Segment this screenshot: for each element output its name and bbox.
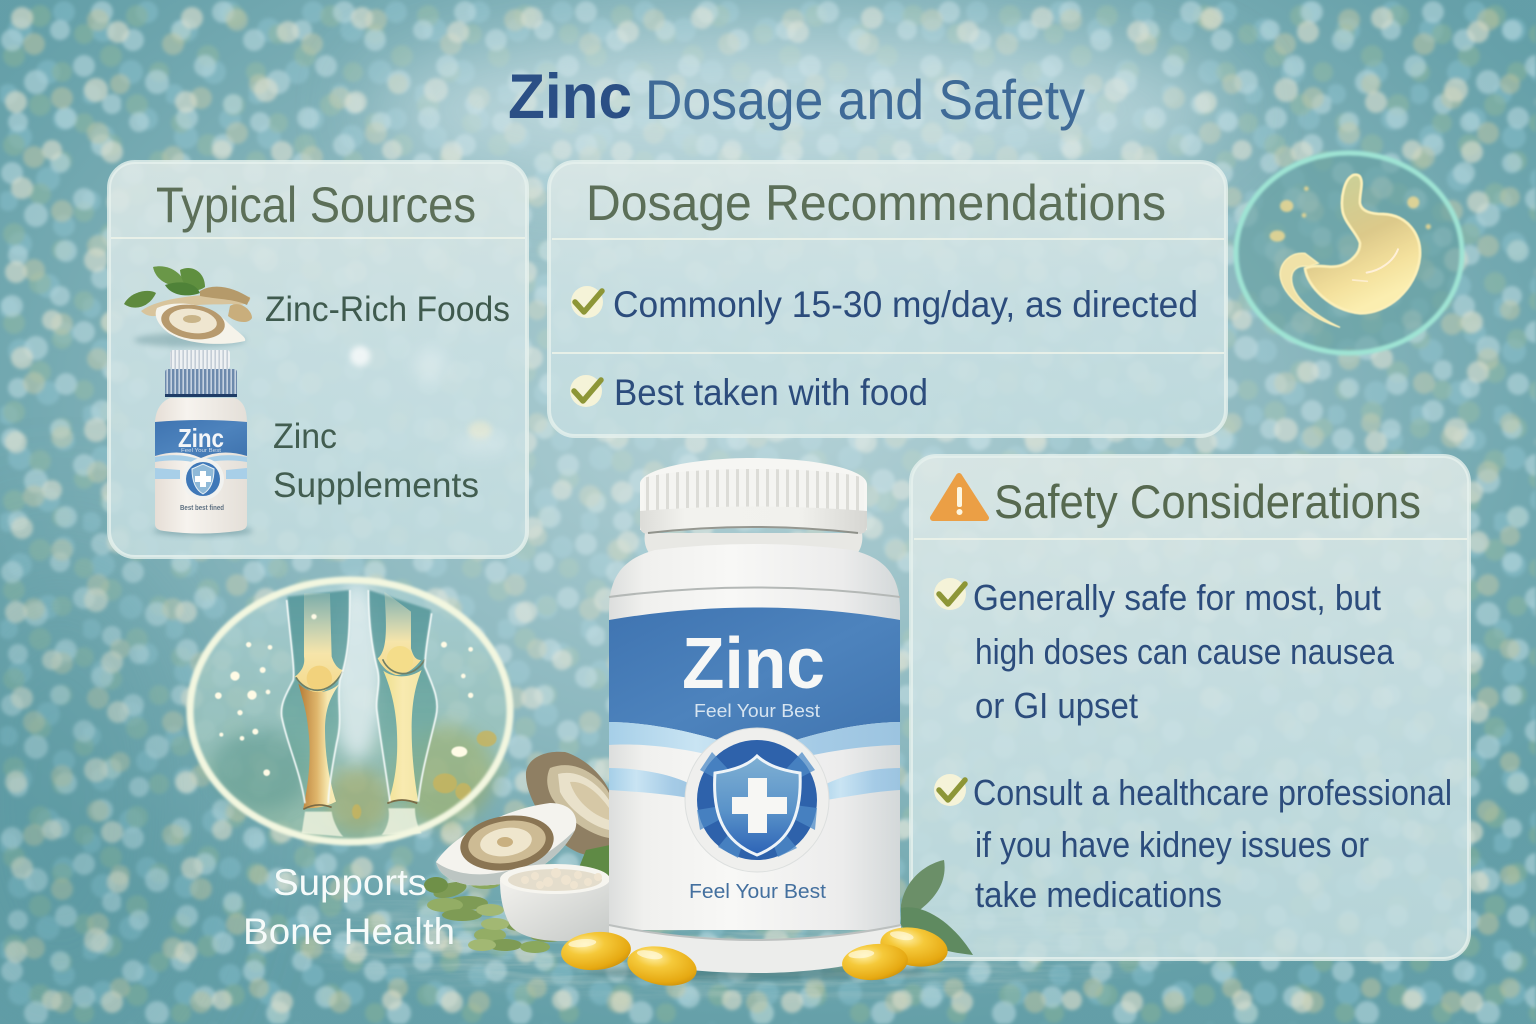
- text: with food: Best taken with food: [614, 372, 928, 413]
- label: zinc-rich foods: Zinc-Rich Foods: [265, 290, 510, 329]
- heading: typical sources: Typical Sources: [156, 177, 476, 233]
- text: daily dose: Commonly 15-30 mg/day, as directed: [613, 284, 1198, 325]
- label: zinc supplements: Zinc: [273, 417, 337, 456]
- label: supports bone health: Supports: [273, 862, 427, 903]
- icon: check: [934, 774, 966, 806]
- icon: check: [571, 286, 603, 318]
- icon: zinc-rich foods: [124, 266, 252, 347]
- label: supports bone health: [243, 862, 455, 952]
- heading: safety considerations: Safety Considerations: [994, 475, 1421, 528]
- text: bottle lower tagline: Feel Your Best: [689, 881, 826, 903]
- icon: small zinc bottle: Best best fined: [180, 505, 224, 512]
- bottle base: [609, 925, 901, 973]
- text: bottle brand: Zinc: [682, 624, 825, 704]
- text: general safety: [973, 577, 1395, 726]
- text: general safety: high doses can cause nausea: [975, 631, 1395, 672]
- title: Zinc: [508, 62, 632, 132]
- title: [508, 62, 1085, 132]
- food: plate with slice: [436, 803, 576, 886]
- panel: dosage recommendations: [549, 162, 1226, 436]
- label: supports bone health: Bone Health: [243, 911, 455, 952]
- icon: small zinc bottle: Feel Your Best: [181, 448, 222, 454]
- icon: check: [570, 375, 602, 407]
- badge: shield with cross: [685, 728, 829, 872]
- icon: warning triangle: [933, 476, 986, 518]
- icon: check: [934, 578, 966, 610]
- text: consult professional: Consult a healthcare professional: [973, 772, 1452, 813]
- bottle label: [609, 608, 900, 802]
- panel: safety considerations: [911, 456, 1469, 959]
- text: consult professional: take medications: [975, 874, 1222, 915]
- text: consult professional: [973, 772, 1452, 915]
- icon: small zinc bottle: Zinc: [178, 423, 224, 453]
- text: bottle tagline: Feel Your Best: [694, 701, 820, 721]
- icon: glowing leg bones circle: [190, 580, 510, 842]
- label: zinc supplements: Supplements: [273, 466, 479, 505]
- food: bowl of white pills: [500, 864, 610, 941]
- food: sliced shells: [526, 752, 610, 878]
- text: consult professional: if you have kidney issues or: [975, 824, 1369, 865]
- main zinc bottle: [585, 458, 925, 980]
- icon: small zinc bottle: [153, 350, 253, 536]
- bottle body: [609, 544, 900, 930]
- illustration: zinc food group: [424, 752, 973, 955]
- panel: typical sources: [109, 162, 527, 557]
- capsules: golden softgels: [559, 922, 951, 991]
- text: general safety: or GI upset: [975, 685, 1138, 726]
- heading: dosage recommendations: Dosage Recommendations: [586, 175, 1166, 231]
- title: Dosage and Safety: [645, 68, 1085, 131]
- food: right leaves: [901, 860, 973, 955]
- bottle cap: [640, 458, 867, 560]
- text: general safety: Generally safe for most, but: [973, 577, 1381, 618]
- label: zinc supplements: [273, 417, 479, 505]
- icon: glowing stomach circle: [1236, 153, 1462, 353]
